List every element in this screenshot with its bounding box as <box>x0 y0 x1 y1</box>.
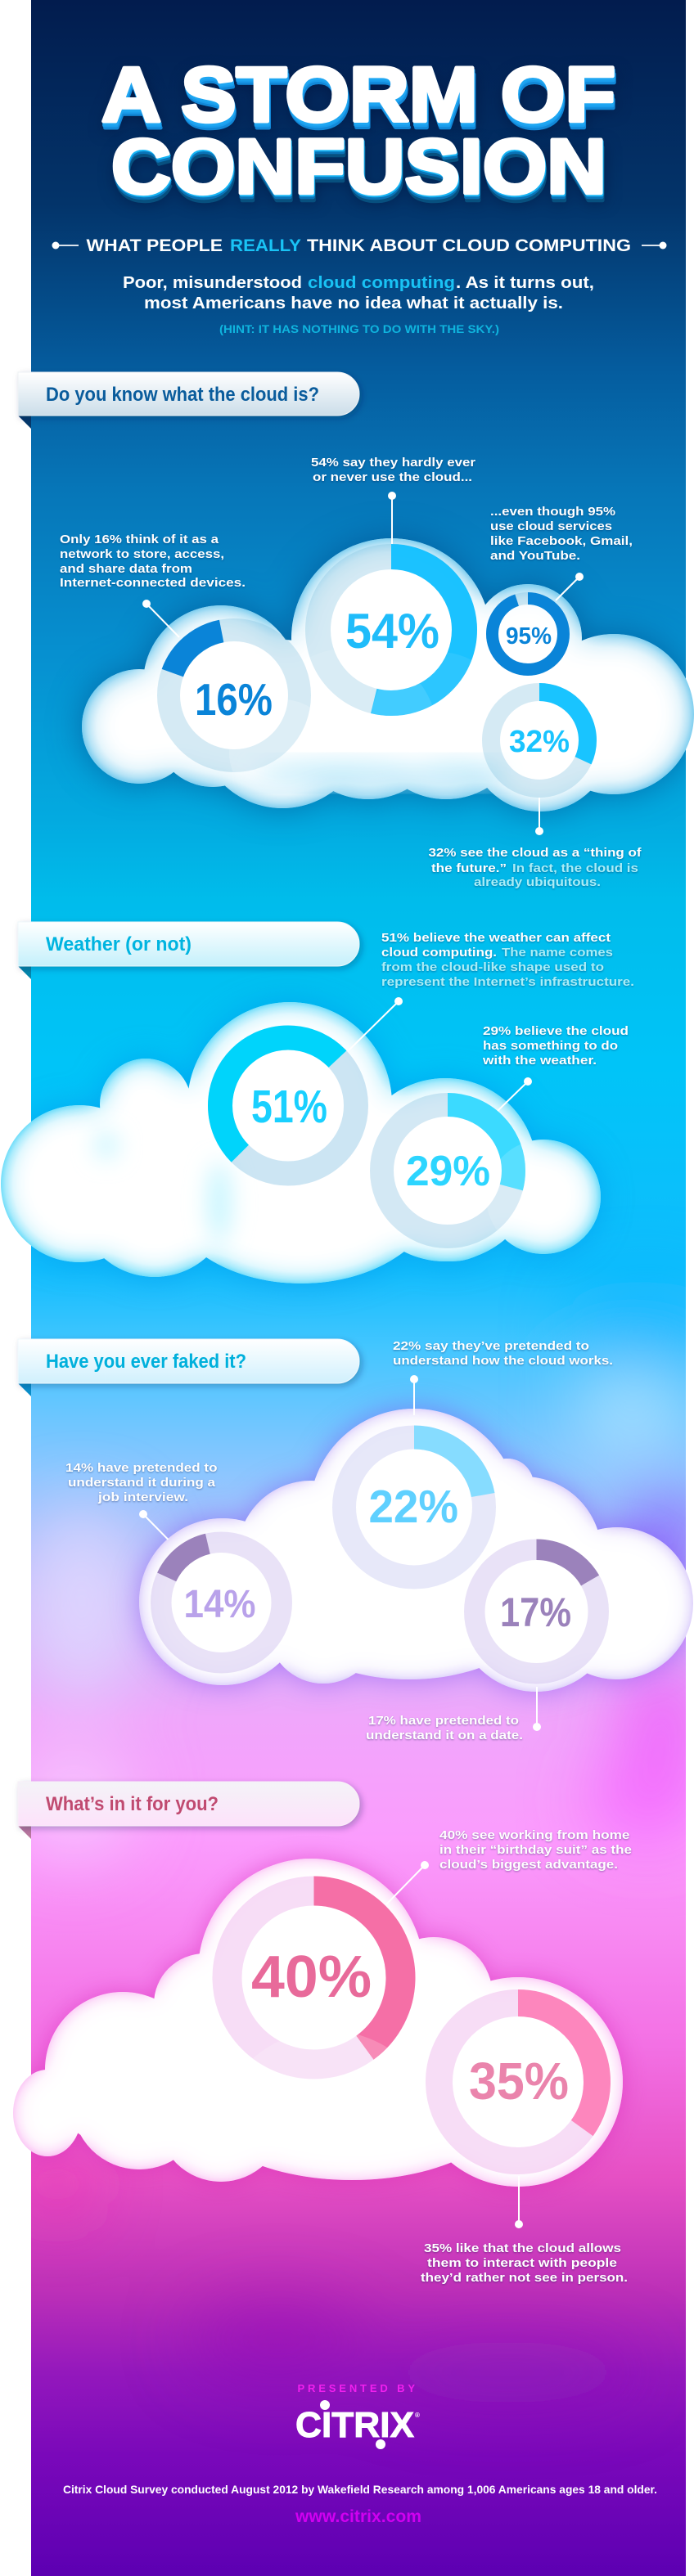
callout: 35%: them to interact with people <box>427 2256 617 2270</box>
section heading: What's in it for you?: What’s in it for you? <box>46 1793 219 1815</box>
cloud 4 <box>13 1859 623 2187</box>
callout: 22%: understand how the cloud works. <box>393 1354 613 1368</box>
donut: 29%: 29% <box>406 1148 490 1195</box>
intro text: cloud computing <box>308 273 455 292</box>
donut: 17% <box>475 1549 598 1674</box>
donut: 51% <box>192 1009 384 1202</box>
callout: 95%: and YouTube. <box>490 549 580 563</box>
callout: 32%: the future.” <box>431 861 507 875</box>
callout: 16%: Only 16% think of it as a <box>60 533 219 546</box>
callout: 51%: cloud computing. <box>381 946 497 960</box>
callout: 40%: 40% see working from home <box>439 1828 630 1842</box>
callouts, section 4 <box>421 1828 632 2285</box>
donut: 17%: 17% <box>500 1589 571 1635</box>
callout: 29%: has something to do <box>483 1039 618 1053</box>
callouts, section 2 <box>381 931 634 1068</box>
callout: 29%: 29% believe the cloud <box>483 1024 629 1038</box>
section heading: Have you ever faked it? <box>18 1339 359 1396</box>
callout: 54%: 54% say they hardly ever <box>311 456 475 470</box>
callout: 51% <box>381 931 634 989</box>
donut: 95%: 95% <box>506 623 552 650</box>
logo: Citrix: ® <box>415 2412 420 2419</box>
donut: 22% <box>344 1437 484 1577</box>
callout: 54%: or never use the cloud... <box>313 470 472 484</box>
callout: 95% <box>490 505 633 563</box>
donut: 54%: 54% <box>345 604 439 659</box>
callout: 51%: 51% believe the weather can affect <box>381 931 611 945</box>
callout: 14% <box>65 1461 218 1504</box>
callout: 32%: already ubiquitous. <box>474 875 601 889</box>
donut: 40%: 40% <box>251 1944 372 2010</box>
callout: 22% <box>393 1339 613 1368</box>
section heading: Do you know what the cloud is?: Do you know what the cloud is? <box>46 384 319 406</box>
callout: 17% <box>366 1714 523 1742</box>
connector lines, section 1 <box>142 492 584 835</box>
callout: 32%: In fact, the cloud is <box>512 861 638 875</box>
survey source note: Citrix Cloud Survey conducted August 2012 by Wakefield Research among 1,006 Americans ages 18 and older. <box>63 2483 657 2496</box>
title <box>101 52 615 210</box>
callout: 16%: Internet-connected devices. <box>60 576 246 590</box>
callout: 51%: represent the Internet’s infrastructure. <box>381 975 634 989</box>
callout: 40% <box>439 1828 632 1872</box>
cloud 3 <box>139 1409 693 1692</box>
callout: 95%: like Facebook, Gmail, <box>490 534 633 548</box>
donut: 32%: 32% <box>509 725 570 759</box>
section heading: Have you ever faked it?: Have you ever faked it? <box>46 1351 246 1373</box>
donut: 22%: 22% <box>368 1481 458 1533</box>
section heading: Weather (or not) <box>18 922 359 979</box>
donut: 16%: 16% <box>195 674 273 725</box>
intro text: . As it turns out, <box>456 273 594 292</box>
donut: 95% <box>493 599 563 669</box>
callout: 17%: understand it on a date. <box>366 1729 523 1742</box>
callout: 16%: network to store, access, <box>60 547 224 561</box>
callout: 17%: 17% have pretended to <box>368 1714 519 1728</box>
section heading: What's in it for you? <box>18 1782 359 1839</box>
cloud 2 <box>1 1002 601 1284</box>
callout: 51%: from the cloud-like shape used to <box>381 960 604 974</box>
callout: 14%: job interview. <box>97 1490 188 1504</box>
donut: 14% <box>141 1522 302 1683</box>
website link text: www.citrix.com <box>295 2507 421 2526</box>
cloud 1 <box>82 538 694 811</box>
callout: 16%: and share data from <box>60 562 192 576</box>
title: A STORM OF <box>101 52 615 138</box>
hint: (HINT: IT HAS NOTHING TO DO WITH THE SKY.) <box>219 322 499 335</box>
callout: 29%: with the weather. <box>482 1054 597 1068</box>
intro text: Poor, misunderstood <box>123 273 302 292</box>
connector lines, section 2 <box>348 997 532 1111</box>
subtitle <box>52 236 666 255</box>
subtitle: WHAT PEOPLE <box>87 236 223 255</box>
subtitle: THINK ABOUT CLOUD COMPUTING <box>307 236 631 255</box>
intro text: most Americans have no idea what it actually is. <box>144 294 563 312</box>
callout: 16% <box>60 533 246 590</box>
callout: 54% <box>311 456 475 484</box>
donut: 29% <box>370 1093 525 1248</box>
callout: 22%: 22% say they’ve pretended to <box>393 1339 589 1353</box>
callout: 95%: ...even though 95% <box>490 505 615 519</box>
donut: 16% <box>157 618 311 772</box>
callout: 29% <box>482 1024 629 1068</box>
callout: 35% <box>421 2241 628 2285</box>
donut: 14%: 14% <box>183 1583 255 1626</box>
callout: 95%: use cloud services <box>490 519 612 533</box>
callout: 51%: The name comes <box>502 946 613 960</box>
donut: 32% <box>491 692 588 789</box>
connector lines, section 3 <box>139 1375 541 1731</box>
callout: 35%: 35% like that the cloud allows <box>424 2241 621 2255</box>
section heading: Do you know what the cloud is? <box>18 372 359 429</box>
intro text <box>123 273 594 312</box>
subtitle: REALLY <box>230 236 301 255</box>
donut: 35%: 35% <box>469 2052 569 2111</box>
logo: Citrix: CITRIX <box>295 2405 414 2445</box>
callout: 32% <box>429 846 642 889</box>
callout: 40%: in their “birthday suit” as the <box>439 1843 632 1857</box>
callout: 40%: cloud’s biggest advantage. <box>439 1858 618 1872</box>
callout: 35%: they’d rather not see in person. <box>421 2271 628 2285</box>
callout: 32%: 32% see the cloud as a “thing of <box>429 846 642 860</box>
presented by: PRESENTED BY <box>298 2382 415 2394</box>
callout: 14%: understand it during a <box>68 1476 216 1490</box>
callouts, section 3 <box>65 1339 613 1742</box>
donut: 54% <box>305 544 477 716</box>
callout: 14%: 14% have pretended to <box>65 1461 218 1475</box>
connector lines, section 4 <box>386 1861 523 2228</box>
callouts, section 1 <box>60 456 642 889</box>
donut: 40% <box>213 1877 416 2079</box>
donut: 51%: 51% <box>251 1081 327 1133</box>
title: CONFUSION <box>111 124 606 210</box>
donut: 35% <box>439 2003 597 2161</box>
section heading: Weather (or not): Weather (or not) <box>46 933 192 955</box>
